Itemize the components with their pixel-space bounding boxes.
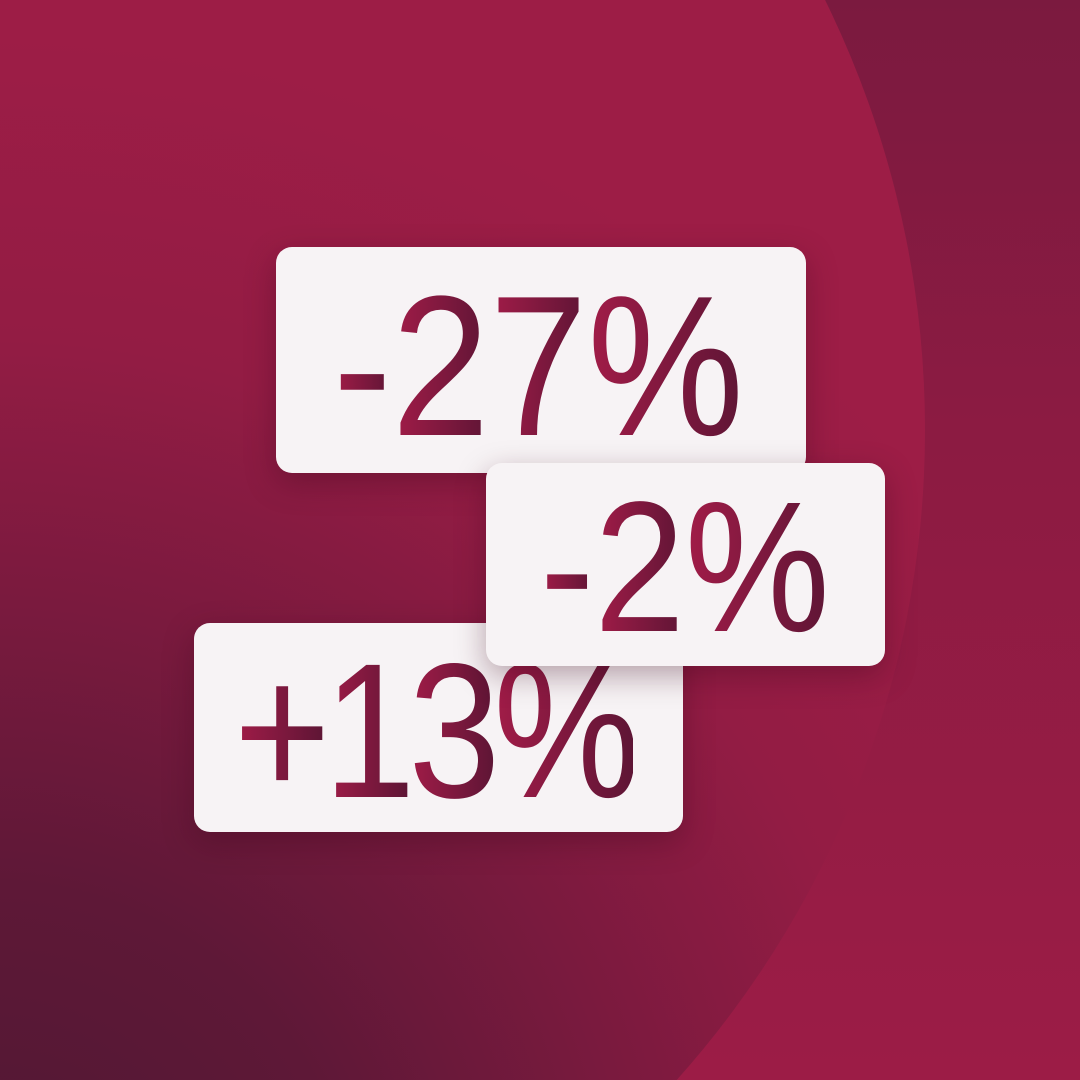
card: -2%: [486, 463, 885, 666]
value: +13%: +13%: [234, 623, 633, 832]
card: -27%: [276, 247, 806, 473]
value: -2%: -2%: [540, 464, 830, 666]
card: +13%: [194, 623, 683, 832]
value: -27%: -27%: [333, 255, 744, 473]
